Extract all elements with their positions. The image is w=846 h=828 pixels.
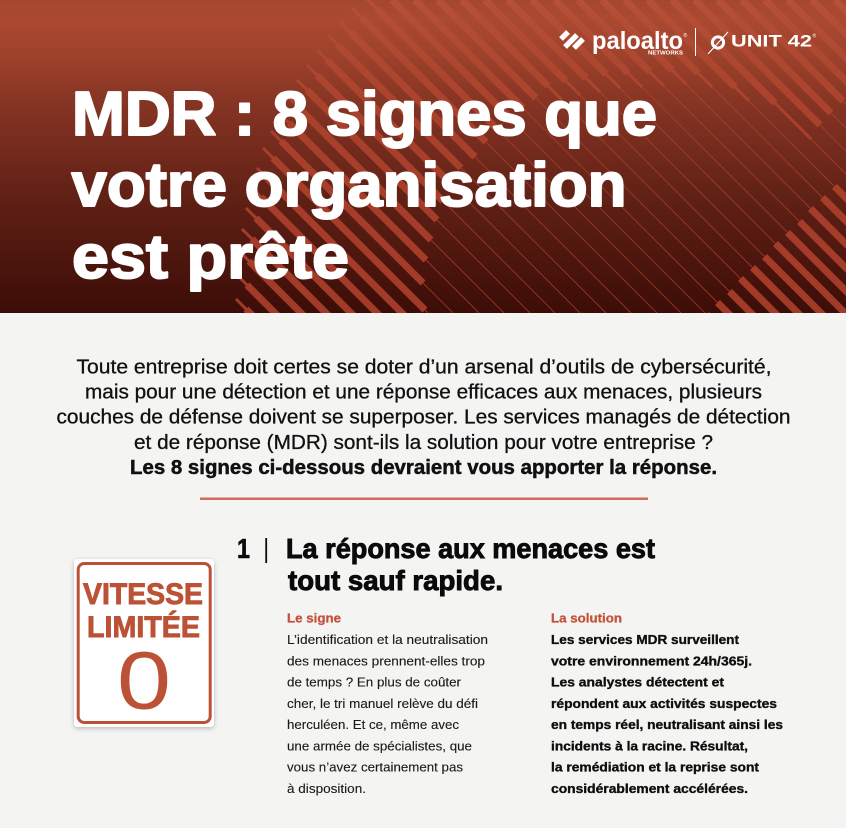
heading number: 1 [237, 533, 250, 564]
title: MDR : 8 signes que [72, 80, 657, 149]
text block: le signe: vous n’avez certainement pas [287, 760, 464, 775]
text block: la solution: Les analystes détectent et [551, 675, 725, 690]
text block: le signe [287, 610, 488, 796]
text block: le signe: Le signe [287, 610, 341, 626]
text block: la solution [551, 610, 783, 796]
heading separator [265, 538, 267, 563]
intro text block: couches de défense doivent se superposer. Les services managés de détection [56, 406, 790, 428]
icon: speed limit sign: VITESSE [83, 578, 203, 611]
icon: Palo Alto mark [561, 32, 583, 48]
text block: la solution: la remédiation et la reprise sont [551, 760, 760, 775]
icon: Unit 42 mark [708, 32, 728, 54]
section heading: sign 1 [237, 533, 655, 596]
text block: la solution: Les services MDR surveillent [551, 632, 740, 647]
text block: la solution: La solution [551, 610, 622, 626]
intro text block: Toute entreprise doit certes se doter d’un arsenal d’outils de cybersécurité, [76, 356, 772, 378]
heading text: tout sauf rapide. [288, 565, 503, 596]
text block: le signe: de temps ? En plus de coûter [287, 675, 462, 690]
logo divider [695, 28, 696, 56]
text block: la solution: votre environnement 24h/365j. [551, 654, 752, 668]
text block: la solution: en temps réel, neutralisant ainsi les [551, 717, 783, 732]
title [72, 80, 657, 292]
logo: Palo Alto Networks: paloalto [592, 27, 683, 55]
logo: Unit 42 [708, 32, 816, 54]
logo: Palo Alto Networks: ® [684, 32, 688, 39]
icon: speed limit sign: 0 [117, 636, 171, 726]
title: votre organisation [72, 151, 626, 220]
text block: le signe: des menaces prennent-elles trop [287, 654, 485, 668]
logo: Unit 42: UNIT 42 [731, 32, 812, 50]
icon: speed limit sign: LIMITÉE [87, 610, 200, 644]
intro text block: mais pour une détection et une réponse efficaces aux menaces, plusieurs [85, 381, 762, 403]
text block: le signe: une armée de spécialistes, que [287, 738, 472, 754]
text block: le signe: cher, le tri manuel relève du défi [287, 696, 478, 711]
logo: Palo Alto Networks: NETWORKS [648, 50, 684, 56]
logo: Unit 42: ® [812, 32, 816, 40]
intro text block [56, 356, 790, 479]
text block: le signe: L’identification et la neutralisation [287, 632, 488, 647]
intro text block: Les 8 signes ci-dessous devraient vous apporter la réponse. [130, 457, 717, 479]
heading text [286, 533, 655, 596]
title: est prête [72, 223, 349, 292]
panel: header banner [0, 0, 846, 320]
text block: le signe: herculéen. Et ce, même avec [287, 717, 460, 732]
heading text: La réponse aux menaces est [286, 533, 655, 564]
icon: speed limit sign [74, 559, 214, 727]
intro text block: et de réponse (MDR) sont-ils la solution pour votre entreprise ? [134, 432, 713, 454]
text block: la solution: considérablement accélérées. [551, 781, 748, 796]
text block: la solution: répondent aux activités suspectes [551, 696, 777, 711]
text block: la solution: incidents à la racine. Résultat, [551, 738, 748, 754]
section divider [200, 498, 648, 500]
text block: le signe: à disposition. [287, 781, 366, 796]
